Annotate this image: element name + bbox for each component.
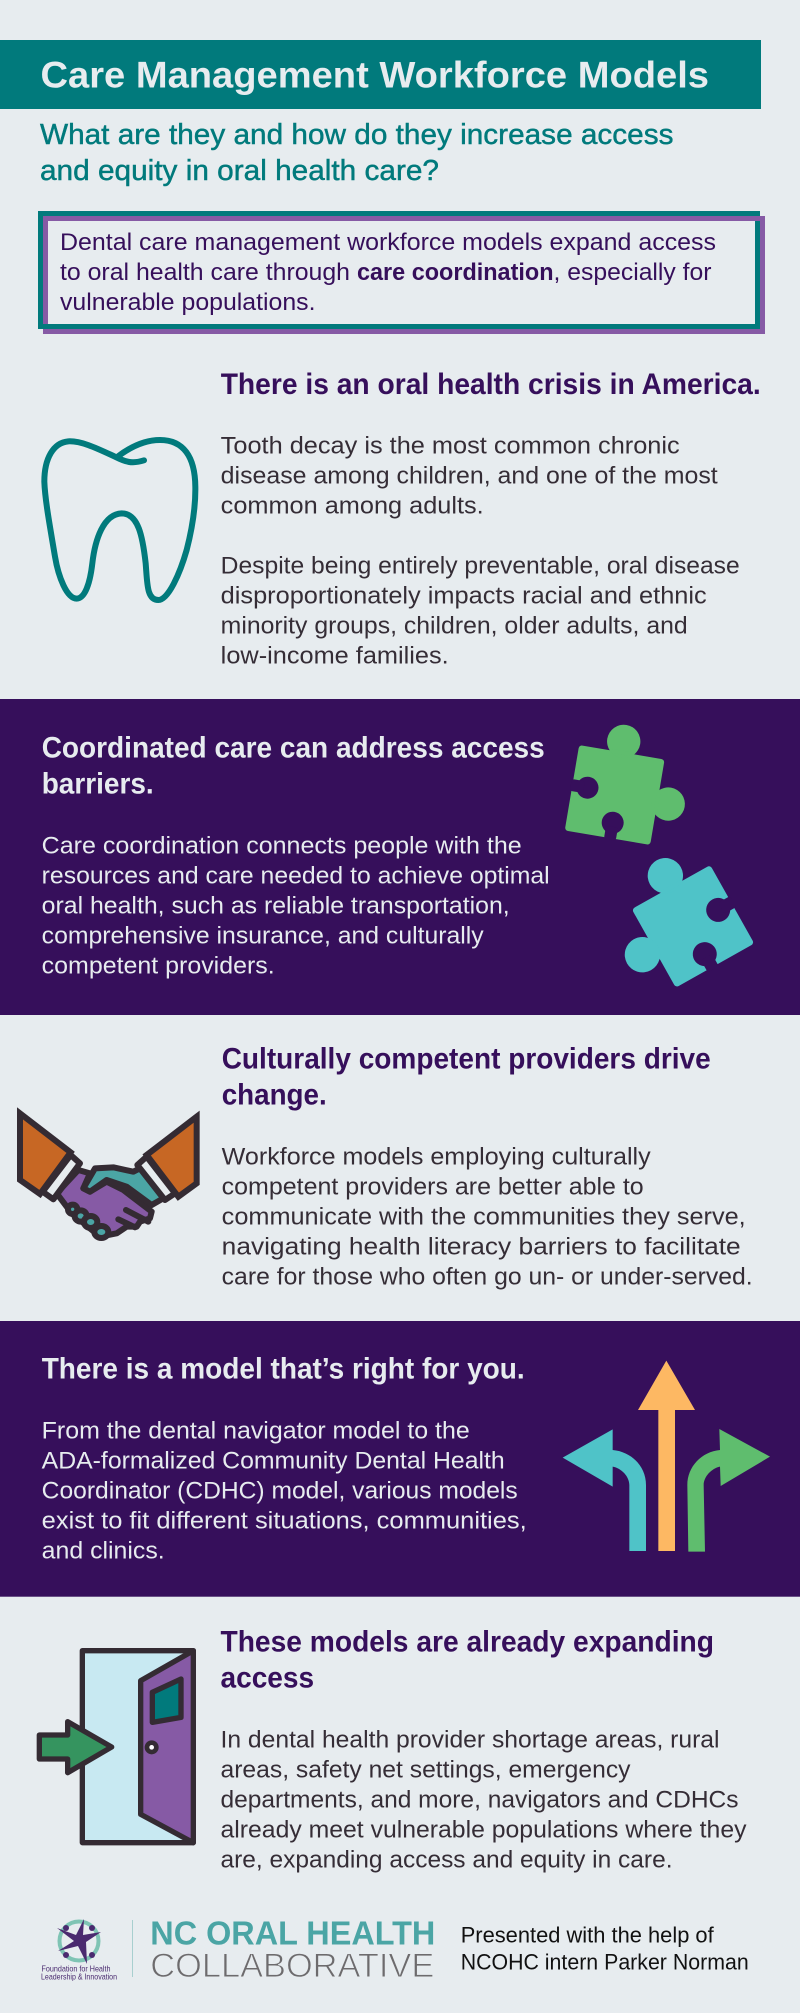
- subtitle: and equity in oral health care?: [40, 155, 439, 187]
- icon: open door with arrow: [39, 1651, 193, 1843]
- heading: expanding access: These models are already expanding: [220, 1626, 714, 1659]
- text block: culturally competent body: navigating health literacy barriers to facilitate: [222, 1233, 741, 1260]
- text block: crisis body: [221, 433, 740, 670]
- text block: expanding access body: [220, 1727, 746, 1874]
- heading: crisis: There is an oral health crisis in America.: [221, 368, 761, 401]
- text block: right model body: [42, 1417, 527, 1564]
- icon: teal puzzle piece: [590, 837, 757, 1005]
- credit text: [461, 1922, 749, 1974]
- text block: right model body: Coordinator (CDHC) model, various models: [42, 1477, 518, 1504]
- text block: crisis body: low-income families.: [221, 643, 449, 670]
- wordmark: NC Oral Health Collaborative: NC ORAL HEALTH: [150, 1914, 435, 1951]
- callout: definition box: [38, 211, 765, 334]
- text block: coordinated care body: comprehensive insurance, and culturally: [42, 922, 484, 949]
- text block: crisis body: common among adults.: [221, 493, 484, 520]
- title banner: Care Management Workforce Models: [40, 54, 709, 95]
- text block: culturally competent body: communicate with the communities they serve,: [222, 1203, 746, 1230]
- icon: green puzzle piece: [563, 717, 697, 851]
- text block: coordinated care body: Care coordination connects people with the: [42, 832, 522, 859]
- logo: Foundation for Health Leadership & Innovation: Foundation for Health: [42, 1964, 111, 1974]
- subtitle: [40, 119, 673, 187]
- icon: three direction arrows: [563, 1361, 770, 1552]
- text block: crisis body: Despite being entirely preventable, oral disease: [221, 553, 740, 580]
- subtitle: What are they and how do they increase access: [40, 119, 673, 151]
- icon: tooth: [44, 440, 195, 600]
- wordmark: NC Oral Health Collaborative: [150, 1914, 435, 1985]
- panel: expanding access: [39, 1626, 747, 1874]
- text block: crisis body: Tooth decay is the most common chronic: [221, 433, 680, 460]
- callout: definition box: care coordination: [357, 259, 554, 286]
- credit text: Presented with the help of: [461, 1922, 715, 1947]
- icon: handshake: [20, 1113, 197, 1238]
- text block: coordinated care body: [42, 832, 550, 979]
- heading: coordinated care: barriers.: [42, 768, 154, 801]
- text block: right model body: From the dental navigator model to the: [42, 1417, 470, 1444]
- heading: culturally competent: change.: [222, 1078, 327, 1111]
- heading: coordinated care: Coordinated care can address access: [42, 732, 545, 765]
- heading: culturally competent: Culturally competent providers drive: [222, 1042, 711, 1075]
- heading: coordinated care: [42, 732, 545, 801]
- footer: [41, 1914, 749, 1985]
- text block: coordinated care body: resources and care needed to achieve optimal: [42, 862, 550, 889]
- logo: Foundation for Health Leadership & Innovation: [41, 1919, 117, 1981]
- panel: oral health crisis: [44, 368, 761, 670]
- text block: expanding access body: already meet vulnerable populations where they: [220, 1817, 746, 1844]
- heading: culturally competent: [222, 1042, 711, 1111]
- text block: expanding access body: areas, safety net settings, emergency: [220, 1757, 630, 1784]
- text block: coordinated care body: competent providers.: [42, 952, 275, 979]
- credit text: NCOHC intern Parker Norman: [461, 1949, 749, 1974]
- text block: crisis body: disproportionately impacts racial and ethnic: [221, 583, 707, 610]
- panel: coordinated care: [0, 699, 800, 1015]
- text block: expanding access body: In dental health provider shortage areas, rural: [220, 1727, 720, 1754]
- text block: crisis body: disease among children, and one of the most: [221, 463, 718, 490]
- text block: culturally competent body: care for those who often go un- or under-served.: [222, 1263, 753, 1290]
- text block: culturally competent body: competent providers are better able to: [222, 1173, 644, 1200]
- text block: culturally competent body: Workforce models employing culturally: [222, 1143, 651, 1170]
- text block: right model body: and clinics.: [42, 1537, 165, 1564]
- text block: expanding access body: departments, and more, navigators and CDHCs: [220, 1787, 738, 1814]
- text block: right model body: ADA-formalized Community Dental Health: [42, 1447, 505, 1474]
- callout: definition box: to oral health care through: [60, 259, 350, 286]
- heading: expanding access: access: [220, 1662, 314, 1695]
- callout: definition box: Dental care management workforce models expand access: [60, 229, 716, 256]
- callout: definition box: , especially for: [554, 259, 712, 286]
- text block: expanding access body: are, expanding access and equity in care.: [220, 1847, 672, 1874]
- text block: coordinated care body: oral health, such as reliable transportation,: [42, 892, 510, 919]
- panel: culturally competent providers: [20, 1042, 753, 1290]
- heading: right model: There is a model that’s right for you.: [42, 1352, 525, 1385]
- wordmark: NC Oral Health Collaborative: COLLABORATIVE: [150, 1947, 434, 1985]
- text block: right model body: exist to fit different situations, communities,: [42, 1507, 527, 1534]
- callout: definition box: vulnerable populations.: [60, 289, 316, 316]
- panel: right model: [0, 1321, 800, 1597]
- text block: culturally competent body: [222, 1143, 753, 1290]
- logo: Foundation for Health Leadership & Innovation: Leadership & Innovation: [41, 1971, 117, 1981]
- text block: crisis body: minority groups, children, older adults, and: [221, 613, 688, 640]
- title banner: [0, 40, 761, 109]
- heading: expanding access: [220, 1626, 714, 1695]
